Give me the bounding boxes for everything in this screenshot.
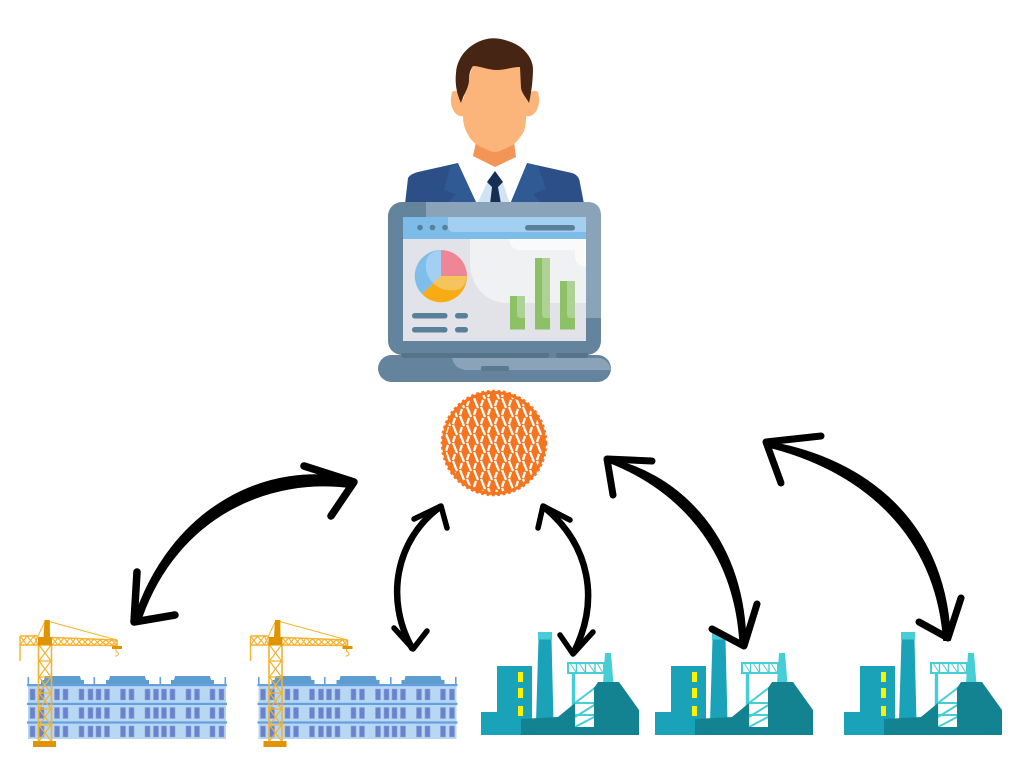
mesh network hub (442, 391, 546, 495)
bar chart (510, 258, 575, 330)
browser header (403, 217, 586, 239)
base highlight (452, 358, 611, 370)
factory 1 (481, 632, 639, 735)
neck (473, 142, 516, 167)
building with crane 1 (20, 620, 227, 747)
browser tab bar (448, 217, 586, 232)
building with crane 2 (250, 620, 458, 747)
person: businessman (405, 38, 584, 204)
shirt front (477, 183, 510, 204)
screen (403, 217, 586, 341)
address bar (525, 225, 575, 230)
tie (487, 171, 503, 204)
screen lighter corner (509, 239, 586, 267)
hair (456, 38, 533, 103)
laptop with dashboard (378, 202, 611, 382)
arrow: hub to building 2 (394, 506, 447, 649)
arrow: hub to factory 1 (538, 506, 593, 654)
arrow: hub to factory 2 (607, 459, 757, 646)
jacket (405, 163, 584, 204)
legend lines (412, 313, 468, 332)
lapels (444, 163, 546, 204)
arrow: hub to building 1 (133, 466, 354, 622)
face (463, 64, 527, 152)
browser dots (417, 225, 448, 230)
screen light panel (470, 239, 586, 303)
ears (451, 91, 539, 116)
laptop base (378, 355, 611, 382)
trackpad notch (481, 366, 509, 371)
laptop lid (388, 202, 601, 355)
factory 3 (844, 632, 1002, 735)
shirt collar (458, 156, 527, 204)
pie chart (415, 250, 467, 302)
lid highlight (426, 202, 601, 318)
arrow: hub to factory 3 (766, 436, 961, 640)
hinges (401, 353, 588, 358)
factory 2 (655, 632, 813, 735)
